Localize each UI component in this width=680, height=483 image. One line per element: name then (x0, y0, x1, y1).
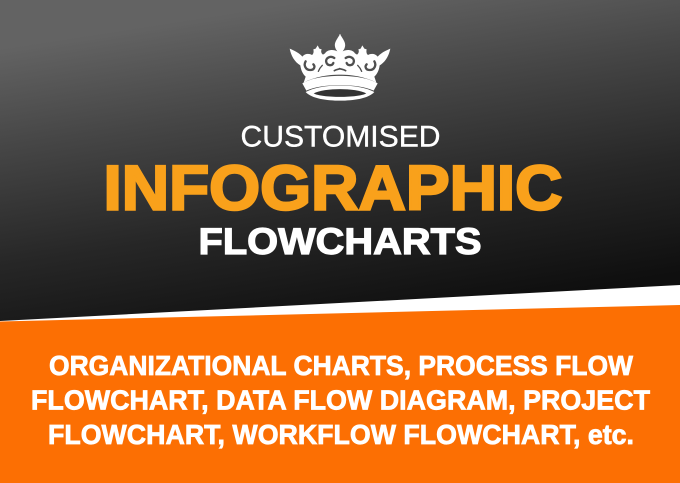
panel: dark gradient header (0, 0, 680, 322)
heading: flowcharts: FLOWCHARTS (198, 220, 482, 262)
text block: chart types: FLOWCHART, WORKFLOW FLOWCHART, etc. (48, 419, 634, 450)
white diagonal stripe (0, 285, 680, 322)
icon: crown (290, 34, 390, 101)
heading: customised: CUSTOMISED (240, 120, 440, 154)
text block: chart types: FLOWCHART, DATA FLOW DIAGRAM, PROJECT (31, 384, 650, 416)
heading: infographic: INFOGRAPHIC (104, 154, 562, 224)
panel: orange footer (0, 305, 680, 483)
text block: chart types (31, 350, 650, 450)
text block: chart types: ORGANIZATIONAL CHARTS, PROCESS FLOW (49, 350, 634, 381)
